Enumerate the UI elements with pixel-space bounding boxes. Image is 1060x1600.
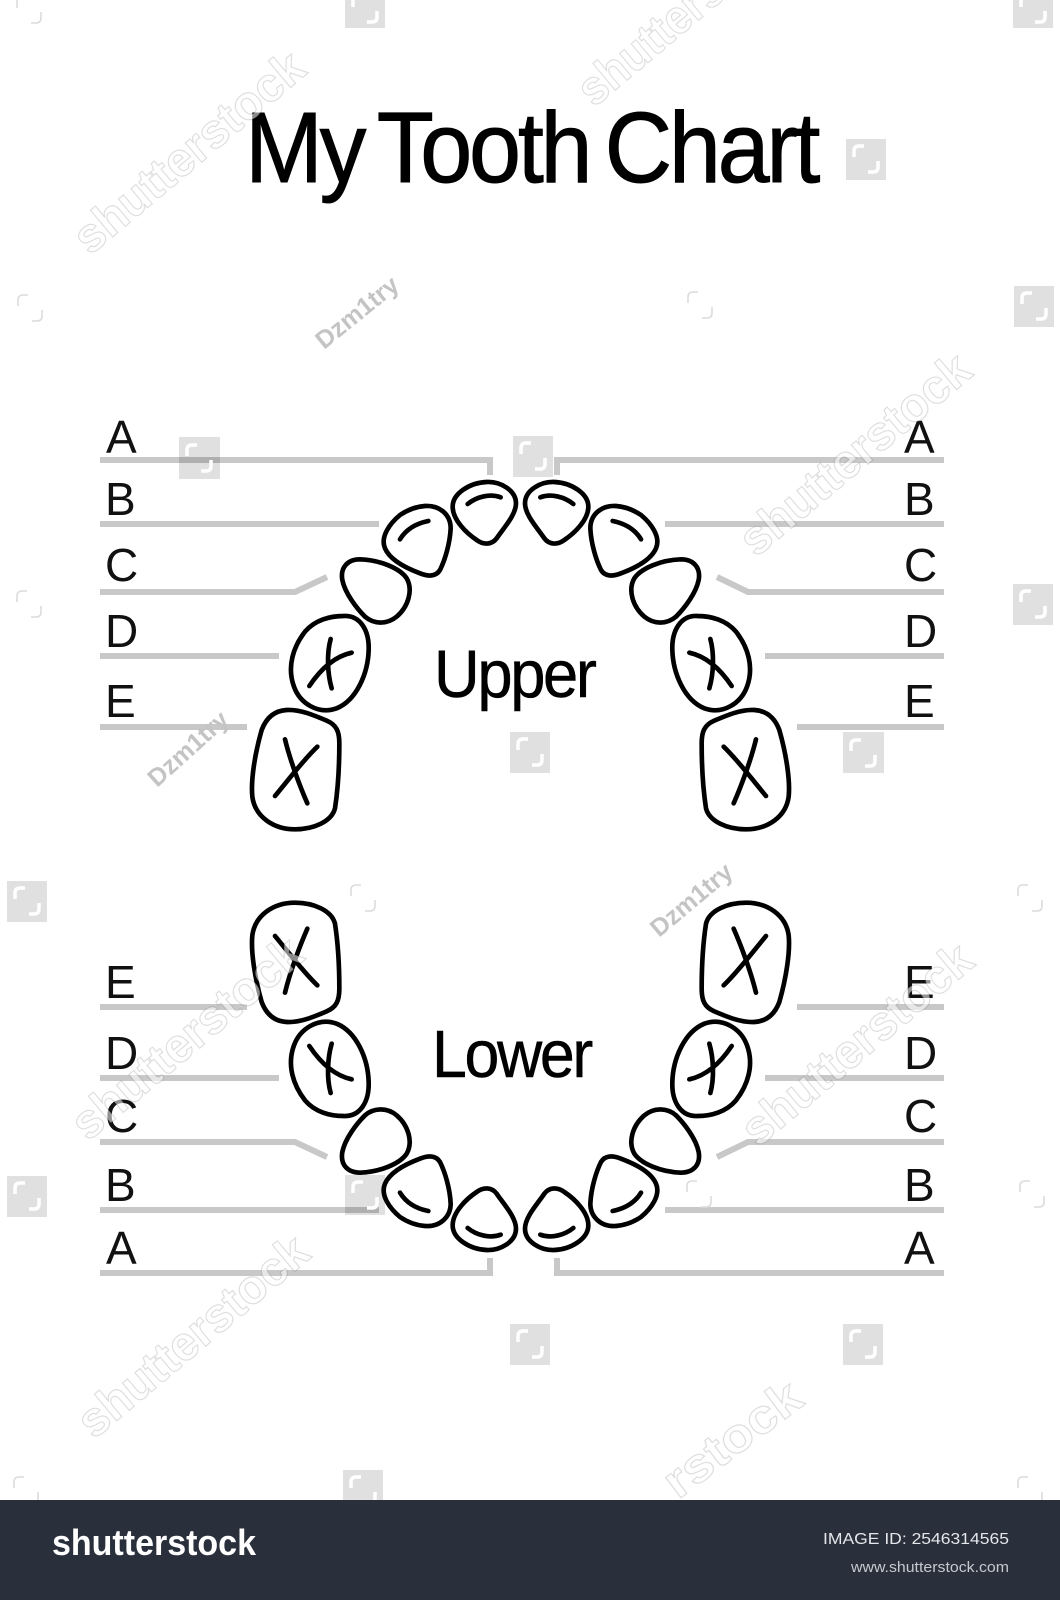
lower left letter labels: E (105, 956, 136, 1008)
lower right teeth (525, 903, 789, 1250)
upper right letter labels: A (904, 411, 935, 463)
tooth B upper right (590, 506, 657, 576)
upper left letter labels: E (105, 675, 136, 727)
tooth C upper left (342, 559, 410, 623)
tooth B lower right (590, 1156, 657, 1226)
watermark wordmarks: shutterstock (67, 1224, 320, 1448)
lower right letter labels: A (904, 1222, 935, 1274)
lower right letter labels: E (904, 956, 935, 1008)
footer logo: shutterstock (52, 1522, 257, 1563)
title: My Tooth Chart (245, 91, 820, 204)
website: www.shutterstock.com (850, 1559, 1009, 1576)
upper left leader lines (100, 460, 490, 727)
lower left leader lines (100, 1007, 490, 1273)
lower left teeth (252, 903, 516, 1250)
lower left letter labels: A (106, 1222, 137, 1274)
upper left letter labels (105, 411, 138, 727)
watermark wordmarks: rstock (653, 1370, 813, 1509)
tooth D lower right (672, 1022, 750, 1116)
author watermarks: Dzm1try (142, 706, 234, 792)
upper right letter labels: E (904, 675, 935, 727)
lower left letter labels: C (105, 1090, 138, 1142)
watermark wordmarks: shutterstock (63, 40, 316, 264)
watermark wordmarks: shutterstock (731, 932, 984, 1156)
lower left letter labels (105, 956, 138, 1274)
tooth E lower left (252, 903, 339, 1022)
upper right letter labels (904, 411, 937, 727)
tooth E lower right (702, 903, 789, 1022)
upper left letter labels: A (106, 411, 137, 463)
tooth C upper right (631, 559, 699, 623)
tooth C lower left (342, 1109, 410, 1173)
upper left letter labels: B (105, 473, 136, 525)
lower right letter labels (904, 956, 937, 1274)
author watermarks (142, 271, 738, 943)
lower left letter labels: D (105, 1027, 138, 1079)
tooth A lower right (525, 1188, 588, 1250)
upper right letter labels: C (904, 539, 937, 591)
upper arch label: Upper (434, 636, 596, 711)
lower right letter labels: B (904, 1159, 935, 1211)
lower right letter labels: D (904, 1027, 937, 1079)
tooth C lower right (631, 1109, 699, 1173)
upper left teeth (252, 482, 516, 829)
upper left letter labels: C (105, 539, 138, 591)
watermark wordmarks: shutterstock (729, 342, 982, 566)
tooth B lower left (384, 1156, 451, 1226)
tooth A upper right (525, 482, 588, 544)
tooth E upper right (702, 710, 789, 829)
footer band (0, 1500, 1060, 1600)
lower arch label: Lower (432, 1016, 593, 1091)
tooth D upper right (672, 616, 750, 710)
upper right teeth (525, 482, 789, 829)
tooth A upper left (453, 482, 516, 544)
lower left letter labels: B (105, 1159, 136, 1211)
tooth D lower left (291, 1022, 369, 1116)
tooth B upper left (384, 506, 451, 576)
author watermarks: Dzm1try (645, 858, 738, 943)
author watermarks: Dzm1try (310, 271, 405, 355)
lower right letter labels: C (904, 1090, 937, 1142)
tooth D upper left (291, 616, 369, 710)
watermark wordmarks: shutterstock (61, 926, 314, 1150)
lower right leader lines (557, 1007, 944, 1273)
upper right letter labels: D (904, 605, 937, 657)
tooth E upper left (252, 710, 339, 829)
tooth A lower left (453, 1188, 516, 1250)
upper right leader lines (557, 460, 944, 727)
upper right letter labels: B (904, 473, 935, 525)
upper left letter labels: D (105, 605, 138, 657)
image id: IMAGE ID: 2546314565 (823, 1531, 1009, 1548)
